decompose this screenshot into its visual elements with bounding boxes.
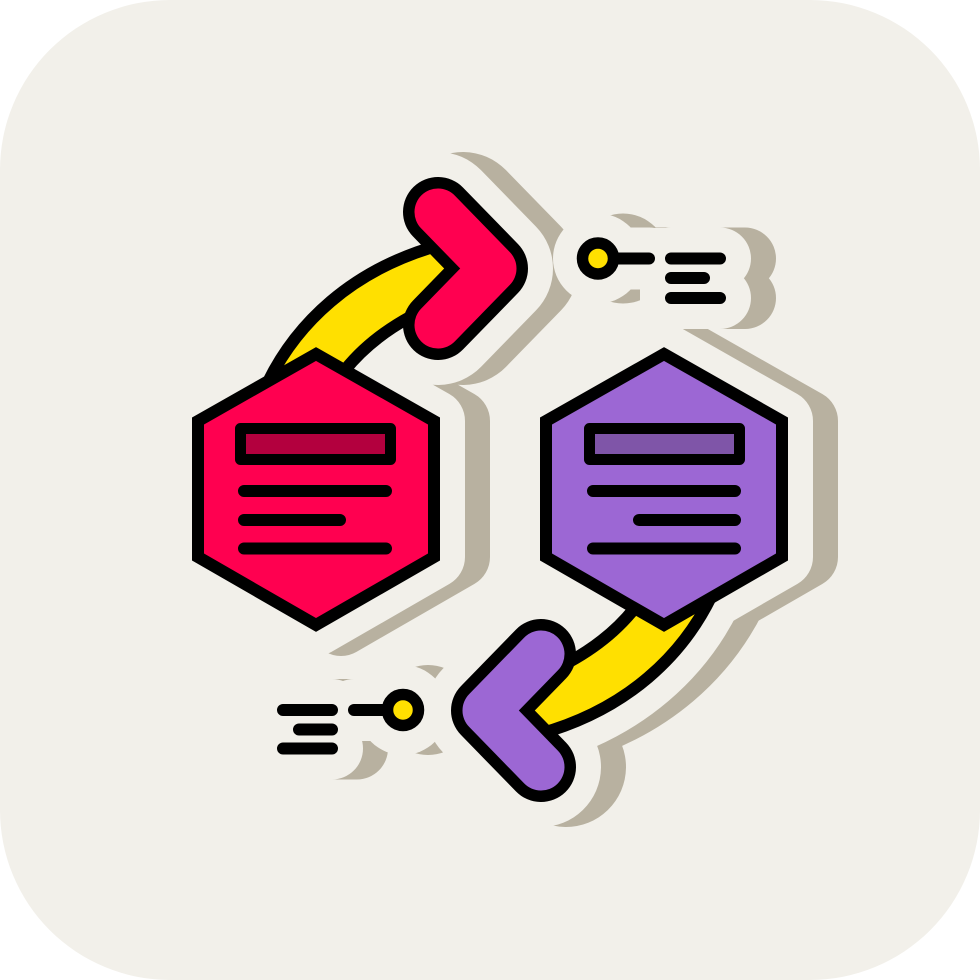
arrow shaft: yellow top xyxy=(268,245,480,382)
node dot top xyxy=(582,243,614,274)
callout: top right node and lines xyxy=(582,243,720,298)
header bar purple xyxy=(590,428,740,460)
text lines red xyxy=(244,491,386,548)
sticker border xyxy=(198,212,782,767)
hexagon body red xyxy=(198,354,434,625)
label lines top xyxy=(671,258,720,298)
arrow head: red chevron xyxy=(438,212,493,325)
hexagon body purple xyxy=(546,354,782,625)
sticker shadow xyxy=(223,212,807,767)
callout: bottom left node and lines xyxy=(283,694,418,748)
arrow: bottom purple arrow from purple hexagon xyxy=(486,597,711,767)
label lines bottom xyxy=(283,710,332,748)
arrow head: purple chevron xyxy=(486,654,541,767)
panel: red hexagon xyxy=(198,354,434,625)
header bar red xyxy=(240,428,390,460)
connector line bottom xyxy=(354,704,403,716)
node dot bottom xyxy=(388,694,418,726)
text lines purple xyxy=(593,491,735,548)
panel: purple hexagon xyxy=(546,354,782,625)
arrow shaft: yellow bottom xyxy=(499,597,711,734)
connector line top xyxy=(598,252,649,264)
arrow: top red arrow from red hexagon xyxy=(268,212,493,382)
